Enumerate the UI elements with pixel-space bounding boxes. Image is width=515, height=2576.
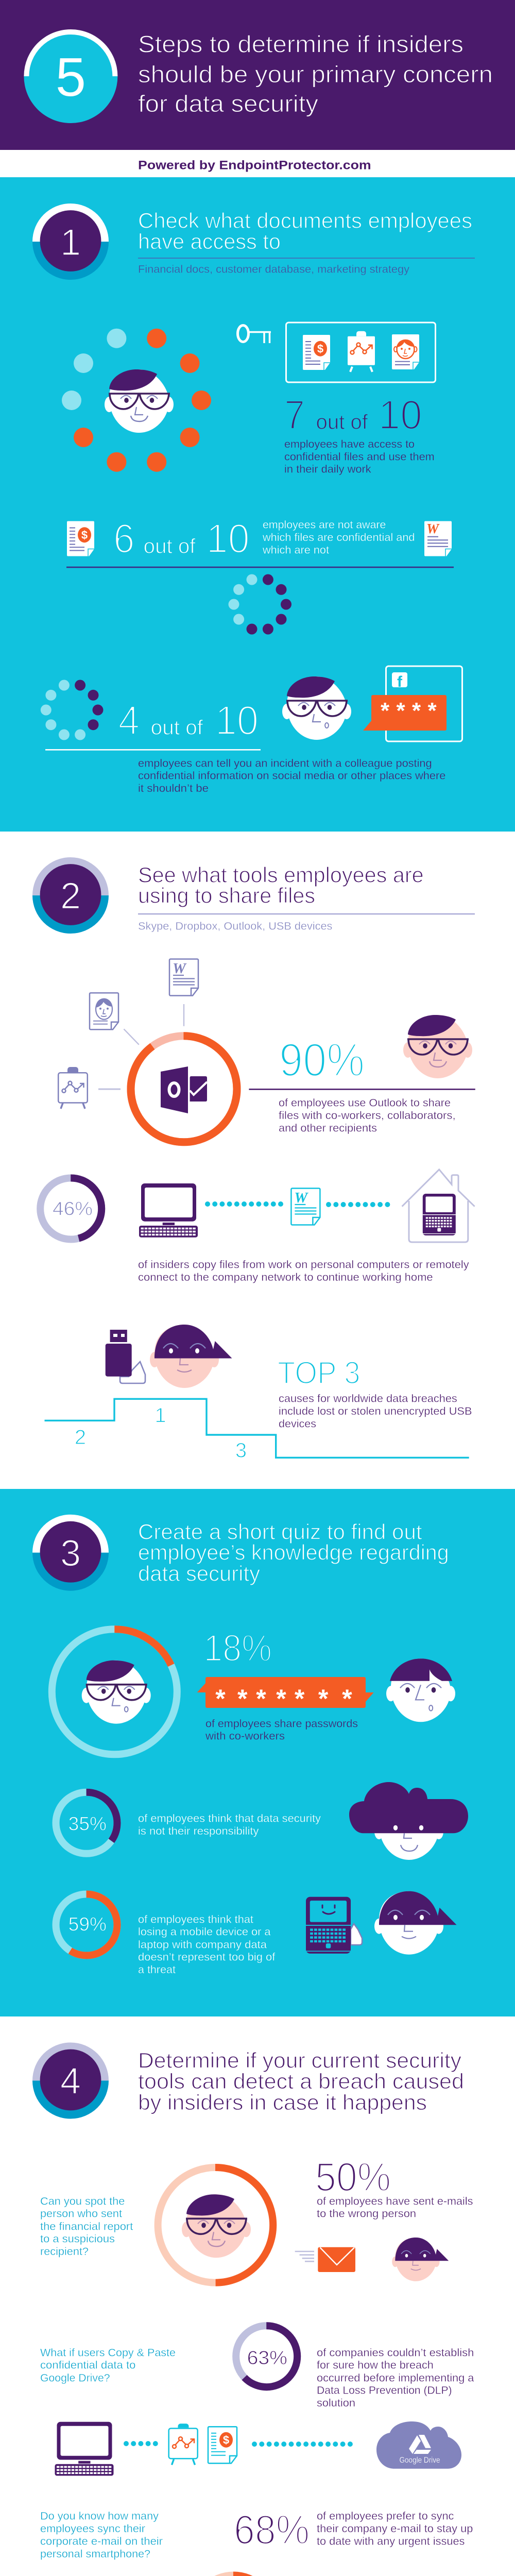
icon: flying envelope (295, 2247, 355, 2272)
panel: step 4 (0, 2016, 515, 2576)
icon: social media post (363, 666, 462, 741)
chart: 7 of 10 dot ring (62, 329, 211, 472)
text: 7 out of 10 description: confidential files and use them (284, 451, 435, 463)
text: 68 percent description: of employees prefer to sync (317, 2511, 454, 2522)
icon: google drive cloud: Google Drive (400, 2456, 440, 2465)
chart: podium steps: 1 (154, 1404, 166, 1427)
heading: step 2 (138, 863, 424, 908)
chart: podium steps (44, 1399, 469, 1462)
heading: step 3: data security (138, 1561, 260, 1585)
icon: work computer (139, 1183, 198, 1238)
text: 18 percent description (205, 1718, 358, 1742)
chart: 90 percent ring (131, 1036, 237, 1142)
text: top 3 description: include lost or stolen unencrypted USB (279, 1405, 472, 1417)
text: top 3 description (279, 1393, 472, 1430)
icon: step 2 badge (32, 857, 109, 934)
chart: 50 percent ring (158, 2167, 273, 2283)
text: 59 percent description (138, 1913, 276, 1976)
chart: podium steps: 3 (235, 1439, 247, 1462)
question: sync e-mail: Do you know how many (40, 2511, 159, 2522)
text: 90 percent description: of employees use Outlook to share (279, 1097, 451, 1109)
question: copy and paste: confidential data to (40, 2360, 135, 2371)
chart: 59 percent ring: 59% (68, 1914, 107, 1935)
text: 59 percent description: losing a mobile device or a (138, 1926, 271, 1938)
icon: pink employee face (182, 2194, 251, 2258)
icon: hand holding laptop (306, 1897, 362, 1954)
stat: 4 out of 10: 4 (118, 698, 140, 743)
question: sync e-mail: corporate e-mail on their (40, 2536, 163, 2548)
heading: step 2: using to share files (138, 884, 315, 908)
icon: word document cyan (291, 1188, 320, 1225)
icon: presentation easel (348, 331, 375, 372)
question: spot the person: Can you spot the (40, 2195, 125, 2207)
question: spot the person (40, 2195, 133, 2258)
heading: step 3 (138, 1519, 449, 1585)
question: sync e-mail: employees sync their (40, 2523, 145, 2535)
text: 59 percent description: laptop with company data (138, 1939, 267, 1951)
icon: masked insider (374, 1891, 456, 1955)
text: 90 percent description: files with co-workers, collaborators, (279, 1110, 456, 1122)
icon: employee face (105, 369, 174, 433)
title: should be your primary concern (138, 61, 493, 88)
icon: laptop in house (423, 1194, 456, 1235)
text: 4 out of 10 description: employees can tell you an incident with a colleague posting (138, 757, 432, 769)
question: spot the person: the financial report (40, 2221, 133, 2232)
text: 90 percent description: and other recipients (279, 1123, 377, 1134)
icon: masked insider small (392, 2238, 449, 2281)
text: 63 percent description (317, 2347, 474, 2409)
chart: 68 percent ring (193, 2575, 274, 2576)
stat: 6 out of 10: 6 (113, 516, 135, 562)
text: 35 percent description: is not their responsibility (138, 1825, 259, 1837)
icon: number five badge: 5 (56, 47, 86, 108)
icon: google drive cloud (376, 2421, 461, 2469)
icon: house (402, 1170, 475, 1242)
heading: step 4: Determine if your current security (138, 2048, 461, 2072)
powered by strip: Powered by EndpointProtector.com (138, 158, 371, 172)
stat: 4 out of 10: 10 (215, 698, 259, 743)
text: 59 percent description: doesn’t represent too big of (138, 1952, 276, 1963)
text: 35 percent description (138, 1813, 321, 1837)
heading: step 3: employee’s knowledge regarding (138, 1540, 449, 1565)
text: 63 percent description: of companies couldn’t establish (317, 2347, 474, 2359)
icon: step 4 badge: 4 (60, 2061, 81, 2102)
icon: financial document cyan: $ (223, 2434, 229, 2447)
chart: 63 percent ring (236, 2326, 297, 2387)
icon: step 3 badge (32, 1515, 109, 1591)
text: 63 percent description: occurred before implementing a (317, 2372, 474, 2384)
question: copy and paste: Google Drive? (40, 2372, 110, 2384)
connector lines (124, 1004, 184, 1045)
text: 7 out of 10 description: employees have access to (284, 438, 415, 450)
stat: 4 out of 10 (118, 698, 259, 743)
callout: password bubble: **** (381, 698, 437, 723)
text: 90 percent description (279, 1097, 456, 1134)
text: 46 percent description: of insiders copy files from work on personal computers or remotely (138, 1259, 469, 1271)
stat: 68 percent: 68% (234, 2506, 310, 2552)
dotted connector (329, 1202, 387, 1207)
text: 63 percent description: solution (317, 2397, 355, 2409)
icon: word document outline: W (173, 960, 187, 977)
text: 68 percent description: their company e-mail to stay up (317, 2523, 473, 2535)
question: copy and paste: What if users Copy & Paste (40, 2347, 176, 2359)
dotted connector (126, 2441, 156, 2446)
text: 50 percent description: of employees have sent e-mails (317, 2195, 473, 2207)
icon: financial document: $ (317, 342, 323, 355)
text: 4 out of 10 description: it shouldn’t be (138, 783, 209, 794)
icon: pink employee face (403, 1015, 472, 1078)
question: sync e-mail (40, 2511, 163, 2560)
stat: 18 percent: 18% (203, 1628, 272, 1669)
icon: facebook logo (392, 672, 407, 690)
icon: step 4 badge (32, 2042, 109, 2119)
icon: word document: W (426, 521, 440, 536)
title (138, 31, 493, 117)
chart: 6 of 10 dot ring (229, 574, 291, 635)
chart: 35 percent ring (56, 1792, 117, 1854)
stat: 50 percent: 50% (315, 2154, 391, 2199)
icon: facebook logo: f (397, 673, 403, 690)
callout: shared password (197, 1677, 374, 1713)
icon: key (238, 326, 271, 343)
text: 50 percent description: to the wrong person (317, 2208, 416, 2220)
stat: 7 out of 10: 10 (379, 392, 422, 438)
question: copy and paste (40, 2347, 176, 2384)
question: spot the person: to a suspicious (40, 2233, 115, 2245)
panel: header (0, 0, 515, 150)
chart: 46 percent ring (40, 1178, 101, 1240)
stat: 7 out of 10: 7 (284, 392, 305, 438)
heading: step 4: tools can detect a breach caused (138, 2069, 464, 2093)
text: top 3 description: devices (279, 1418, 316, 1430)
callout: password bubble (363, 695, 447, 731)
panel: step 1 (0, 177, 515, 832)
panel: step 3 (0, 1489, 515, 2016)
stat: 90 percent: 90% (279, 1034, 365, 1086)
chart: 18 percent ring (52, 1629, 177, 1754)
title: Steps to determine if insiders (138, 31, 464, 58)
text: 6 out of 10 description: which are not (262, 544, 329, 556)
icon: financial document (303, 335, 330, 370)
icon: step 1 badge: 1 (60, 222, 81, 263)
subheading: step 2: Skype, Dropbox, Outlook, USB devices (138, 920, 332, 932)
powered by strip (0, 150, 515, 177)
heading: step 4 (138, 2048, 464, 2114)
icon: word document cyan: W (294, 1190, 308, 1206)
text: top 3 description: causes for worldwide data breaches (279, 1393, 457, 1405)
icon: computer (55, 2422, 113, 2476)
text: 63 percent description: for sure how the breach (317, 2360, 434, 2371)
stat: 6 out of 10 (113, 516, 250, 562)
icon: financial document (67, 521, 94, 556)
chart: 59 percent ring (56, 1894, 117, 1956)
text: 50 percent description (317, 2195, 473, 2220)
title: for data security (138, 90, 318, 117)
icon: step 2 badge: 2 (60, 876, 81, 917)
text: 18 percent description: of employees share passwords (205, 1718, 358, 1730)
text: 59 percent description: a threat (138, 1964, 176, 1976)
chart: 4 of 10 dot ring (41, 680, 103, 740)
text: 18 percent description: with co-workers (205, 1731, 285, 1742)
icon: financial document cyan (208, 2427, 237, 2463)
text: 6 out of 10 description: employees are not aware (263, 519, 386, 531)
heading: step 1: have access to (138, 229, 281, 253)
stat: 4 out of 10: out of (151, 717, 203, 739)
text: 68 percent description: to date with any urgent issues (317, 2536, 465, 2548)
chart: 46 percent ring: 46% (53, 1198, 93, 1219)
stat: 7 out of 10 (284, 392, 422, 438)
icon: coworker face (386, 1658, 455, 1722)
heading: step 3: Create a short quiz to find out (138, 1519, 422, 1544)
text: 4 out of 10 description: confidential information on social media or other places where (138, 770, 445, 782)
icon: presentation cyan (169, 2424, 198, 2465)
text: 35 percent description: of employees think that data security (138, 1813, 321, 1825)
question: spot the person: person who sent (40, 2208, 122, 2220)
dotted connector (208, 1201, 281, 1207)
icon: surprised employee face (282, 676, 351, 740)
text: 46 percent description (138, 1259, 469, 1283)
heading: step 1: Check what documents employees (138, 209, 472, 233)
chart: 35 percent ring: 35% (68, 1814, 107, 1835)
text: 6 out of 10 description (262, 519, 415, 556)
panel: step 2 (0, 832, 515, 1489)
heading: step 4: by insiders in case it happens (138, 2090, 427, 2114)
icon: step 3 badge: 3 (60, 1533, 81, 1574)
question: sync e-mail: personal smartphone? (40, 2548, 150, 2560)
heading: step 2: See what tools employees are (138, 863, 424, 887)
text: 7 out of 10 description: in their daily work (284, 464, 371, 476)
icon: customer document (392, 334, 419, 369)
icon: word document outline (169, 959, 198, 995)
stat: 6 out of 10: 10 (206, 516, 250, 562)
icon: customer document outline (90, 993, 118, 1029)
callout: shared password: ******* (215, 1684, 352, 1713)
icon: number five badge (24, 29, 117, 123)
question: spot the person: recipient? (40, 2246, 89, 2258)
icon: word document (424, 521, 452, 556)
chart: 63 percent ring: 63% (247, 2347, 287, 2368)
icon: head in the cloud (349, 1782, 468, 1860)
icon: financial document: $ (81, 529, 88, 541)
dotted connector (254, 2442, 357, 2447)
stat: top 3: TOP 3 (278, 1355, 360, 1390)
stat: 6 out of 10: out of (144, 535, 196, 557)
icon: hand holding USB (106, 1330, 145, 1383)
text: 6 out of 10 description: which files are confidential and (262, 532, 415, 544)
chart: podium steps: 2 (75, 1426, 86, 1449)
subheading: step 1: Financial docs, customer database, marketing strategy (138, 263, 410, 275)
icon: masked insider (150, 1325, 232, 1388)
icon: outlook logo (161, 1066, 207, 1113)
text: 68 percent description (317, 2511, 473, 2548)
icon: presentation outline (58, 1067, 88, 1109)
text: 46 percent description: connect to the company network to continue working home (138, 1272, 433, 1283)
icon: surprised employee face (82, 1660, 151, 1724)
text: 4 out of 10 description (138, 757, 445, 794)
heading: step 1 (138, 209, 472, 253)
text: 63 percent description: Data Loss Prevention (DLP) (317, 2385, 452, 2397)
stat: 7 out of 10: out of (316, 411, 368, 434)
panel: confidential files box (286, 323, 436, 382)
icon: step 1 badge (32, 204, 109, 280)
text: 59 percent description: of employees think that (138, 1913, 253, 1925)
text: 7 out of 10 description (284, 438, 435, 476)
